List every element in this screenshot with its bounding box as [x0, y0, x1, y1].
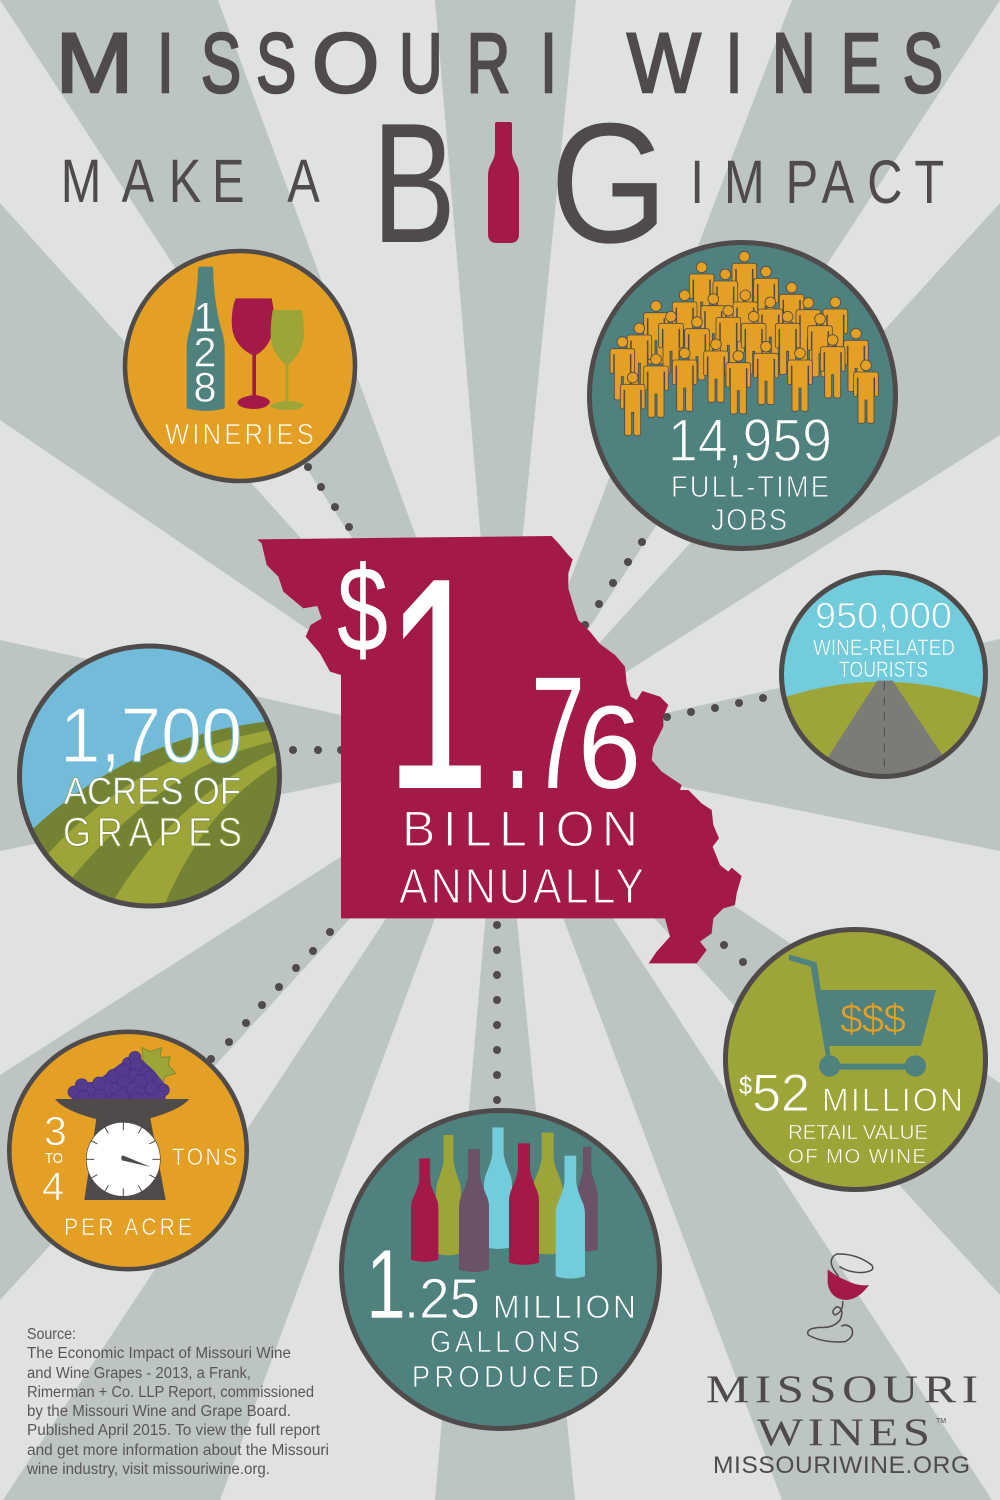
ring — [782, 572, 986, 776]
label: wineries: WINERIES — [165, 417, 314, 450]
bottle — [187, 267, 225, 411]
needle — [121, 1155, 151, 1167]
dollar sign: $ — [337, 541, 388, 677]
figure: 52: 52 — [752, 1064, 810, 1123]
panel: wineries — [125, 251, 355, 481]
number 128: 2 — [193, 330, 216, 376]
dollar superscript: $ — [739, 1072, 752, 1100]
figure: 14,959: 14,959 — [668, 407, 832, 474]
circle — [342, 1110, 660, 1428]
heading: G of BIG: G — [550, 88, 668, 279]
title: Missouri Wines: INES — [726, 16, 943, 110]
wordmark: Missouri: MISSOURI — [706, 1368, 978, 1411]
source note: and Wine Grapes - 2013, a Frank, — [27, 1365, 251, 1382]
label: grapes: GRAPES — [63, 810, 242, 856]
white wine glass — [270, 310, 304, 410]
heading: B of BIG: B — [372, 88, 456, 279]
panel: wine-related tourists — [782, 572, 986, 785]
icon: wine bottle as I of BIG — [488, 122, 519, 243]
title: Missouri Wines: O — [312, 17, 379, 111]
icon: grape scale — [55, 1047, 189, 1200]
leaves — [142, 1047, 176, 1083]
source note: wine industry, visit missouriwine.org. — [26, 1461, 270, 1478]
scale pan — [55, 1099, 189, 1122]
figure: 950,000: 950,000 — [815, 595, 952, 636]
label: produced: PRODUCED — [412, 1360, 599, 1394]
label: wine-related: WINE-RELATED — [813, 635, 955, 660]
icon: crowd of workers — [610, 251, 878, 436]
figure: .7: .7 — [504, 643, 585, 822]
figure: .25: .25 — [404, 1267, 480, 1331]
icon: vineyard field — [33, 722, 277, 904]
source note: Published April 2015. To view the full report — [27, 1422, 321, 1439]
figure: 3: 3 — [44, 1108, 67, 1154]
panel: gallons produced — [342, 1110, 660, 1428]
label: per acre: PER ACRE — [64, 1214, 192, 1240]
circle — [9, 1032, 247, 1269]
label: gallons: GALLONS — [430, 1325, 580, 1359]
figure: 1: 1 — [385, 515, 490, 852]
icon: wine bottles — [411, 1127, 598, 1279]
source note: Rimerman + Co. LLP Report, commissioned — [27, 1384, 314, 1401]
panel: tons per acre — [9, 1032, 247, 1269]
icon: bottle and glasses — [187, 267, 304, 411]
panel: retail value — [726, 930, 986, 1190]
source note: by the Missouri Wine and Grape Board. — [27, 1403, 291, 1420]
heading: Impact: IMPACT — [690, 148, 944, 216]
figure: 1,700: 1,700 — [60, 691, 242, 779]
source note — [26, 1326, 329, 1478]
figure: 1: 1 — [366, 1229, 406, 1339]
heading: Make a: MAKE A — [61, 147, 320, 215]
title: Missouri Wines: W — [627, 17, 701, 111]
label: Billion: BILLION — [402, 801, 638, 857]
icon: shopping cart — [789, 954, 936, 1077]
dial — [86, 1122, 160, 1196]
source note: The Economic Impact of Missouri Wine — [27, 1345, 291, 1362]
icon: road through fields — [786, 680, 980, 774]
panel: acres of grapes — [17, 644, 282, 908]
label: acres of: ACRES OF — [64, 771, 241, 813]
circle sky — [782, 572, 986, 776]
logo: Missouri Wines — [706, 1254, 978, 1479]
title: Missouri Wines: ISS — [157, 16, 296, 110]
label: to: TO — [45, 1151, 63, 1167]
ring — [20, 646, 280, 906]
wordmark: Wines: WINES — [757, 1411, 930, 1454]
figure: 4: 4 — [42, 1165, 64, 1209]
circle — [125, 251, 355, 481]
figure: 6: 6 — [578, 682, 641, 814]
circle — [726, 930, 986, 1190]
number 128: 1 — [193, 295, 216, 341]
title: Missouri Wines: M — [56, 16, 133, 110]
title: Missouri Wines: URI — [399, 16, 557, 110]
source note: Source: — [27, 1326, 76, 1343]
label: million: MILLION — [822, 1082, 963, 1118]
trademark: TM — [936, 1418, 946, 1425]
label: tons: TONS — [172, 1144, 237, 1170]
scale base — [84, 1117, 166, 1200]
circle sky — [20, 646, 280, 906]
icon: swirling wine glass — [808, 1254, 873, 1342]
panel: Missouri map with total — [257, 515, 742, 963]
dollar signs: $$$ — [840, 995, 906, 1041]
label: million: MILLION — [493, 1289, 636, 1325]
label: retail value: RETAIL VALUE — [788, 1121, 928, 1144]
website: MISSOURIWINE.ORG — [713, 1452, 970, 1479]
red wine glass — [232, 298, 274, 409]
connector dots — [207, 463, 767, 1104]
label: full-time: FULL-TIME — [671, 470, 829, 504]
label: of MO wine: OF MO WINE — [788, 1145, 926, 1168]
label: jobs: JOBS — [711, 503, 787, 537]
source note: and get more information about the Missouri — [27, 1442, 329, 1459]
number 128: 8 — [193, 365, 216, 411]
number 128 — [193, 295, 216, 411]
title: Missouri Wines — [56, 16, 943, 111]
label: tourists: TOURISTS — [839, 657, 928, 682]
label: Annually: ANNUALLY — [399, 858, 644, 914]
grape bunch — [68, 1051, 169, 1109]
map of Missouri — [257, 536, 742, 963]
circle — [590, 242, 896, 548]
panel: full-time jobs — [590, 242, 896, 548]
